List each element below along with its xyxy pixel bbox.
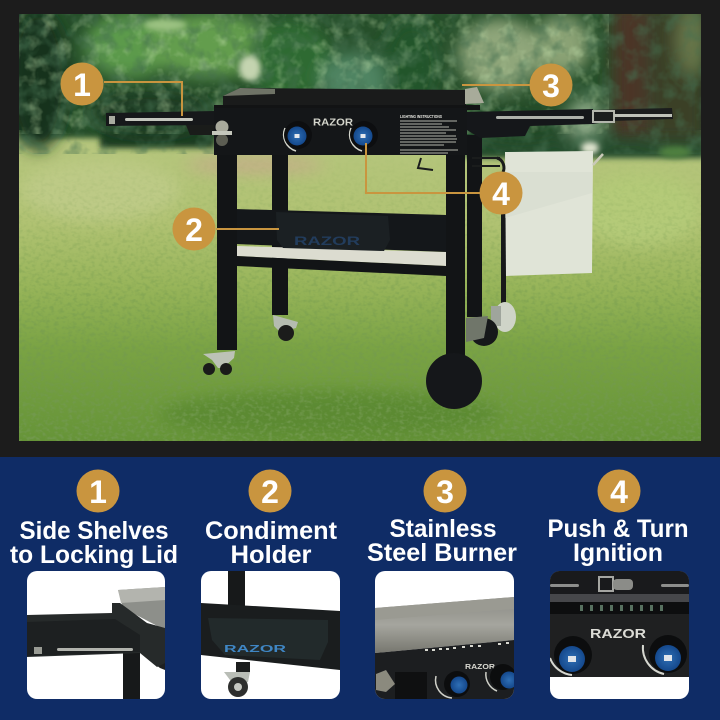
image card 2: RAZOR: [224, 644, 287, 655]
grill: lid: [214, 87, 484, 110]
grill: right side shelf: [467, 108, 673, 138]
badge 4: [598, 470, 640, 512]
lighting instructions: [400, 114, 458, 153]
image card 1: [27, 571, 165, 699]
badge 3: 3: [436, 474, 454, 510]
grill: propane regulator: [491, 302, 516, 332]
photo frame background: [0, 0, 720, 457]
badge 2: [248, 470, 292, 512]
grill: cross beam: [235, 209, 447, 252]
callout 4: ignition: 4: [492, 176, 510, 212]
badge 4: 4: [610, 474, 628, 510]
feature 3: stainless steel burner: [367, 470, 518, 699]
grill: front legs: [217, 155, 465, 356]
callout 3: stainless burner: 3: [542, 68, 560, 104]
grill: control panel: RAZOR: [313, 118, 354, 128]
feature 2: condiment holder: [201, 470, 340, 699]
grill: main wheel: [426, 353, 482, 409]
feature 4: push and turn ignition: [548, 470, 689, 699]
grill: rear legs: [272, 135, 482, 317]
image card 3: [375, 571, 518, 699]
heading 1: Side Shelves: [20, 517, 168, 545]
grill: condiment holder: [276, 212, 390, 251]
feature 1: side shelves: [10, 470, 178, 699]
heading 4: Push & Turn: [548, 515, 688, 543]
grill: side hardware: [418, 158, 504, 172]
heading 3: [367, 515, 517, 567]
callout 2: condiment holder: [172, 208, 279, 250]
image card 2: [201, 571, 340, 699]
grill: lower shelf: [237, 246, 446, 276]
photo: grill on lawn: [8, 4, 708, 441]
grill: control panel: [212, 108, 467, 155]
heading 3: Stainless: [390, 515, 496, 543]
callout 2: condiment holder: 2: [185, 212, 203, 248]
image card 4: RAZOR: [590, 626, 647, 641]
callout 1: side shelves: 1: [73, 67, 91, 103]
heading 2: Holder: [230, 541, 312, 569]
right knob: [350, 121, 378, 151]
callout 4: ignition: [366, 143, 522, 214]
image card 3: RAZOR: [465, 664, 495, 671]
grill: front casters: [203, 351, 235, 375]
grill: condiment holder: RAZOR: [294, 236, 361, 248]
badge 1: 1: [89, 474, 107, 510]
feature panel background: [0, 457, 720, 720]
heading 3: Steel Burner: [367, 539, 517, 567]
grill: rear casters: [273, 315, 488, 342]
badge 3: [424, 470, 466, 512]
heading 1: to Locking Lid: [10, 541, 178, 569]
lighting instructions: LIGHTING INSTRUCTIONS: [400, 114, 443, 120]
image card 4: [550, 571, 689, 699]
heading 2: [205, 517, 338, 569]
callout 3: stainless burner: [462, 64, 572, 106]
left knob: [284, 121, 312, 151]
heading 1: [10, 517, 178, 569]
badge 1: [76, 470, 120, 512]
heading 2: Condiment: [205, 517, 338, 545]
grill: left side shelf: [106, 111, 216, 135]
grill: rear wheel: [473, 318, 498, 346]
heading 4: [548, 515, 688, 567]
lawn: [19, 130, 701, 441]
heading 4: Ignition: [573, 539, 663, 567]
callout 1: side shelves: [60, 62, 182, 116]
grill: paper sheet: [501, 151, 603, 305]
tree line backdrop: [8, 4, 708, 158]
badge 2: 2: [261, 474, 279, 510]
